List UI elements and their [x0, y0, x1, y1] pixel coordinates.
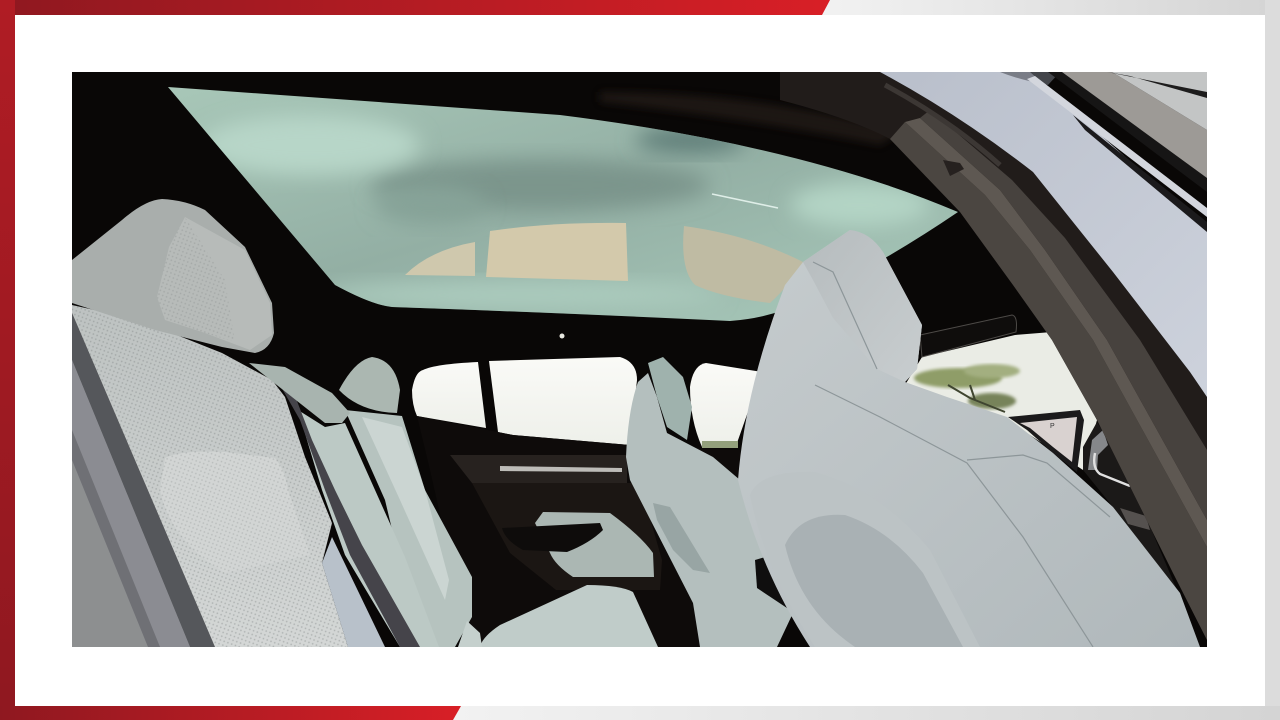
dark headliner [72, 72, 1207, 647]
seat cushion [480, 585, 658, 647]
front side window sky [905, 332, 1097, 470]
display screen: P [1050, 423, 1055, 430]
dashboard and steering wheel [1083, 422, 1177, 590]
frame: left red band [0, 0, 15, 720]
frame: right grey band [1265, 0, 1280, 720]
far rear seat [339, 357, 658, 647]
display screen [1008, 410, 1084, 472]
driver seat, large [738, 230, 1200, 647]
seat side panel [301, 412, 420, 647]
roof reflections of rear windows [405, 242, 475, 276]
frame: top band [0, 0, 1280, 15]
rear side windows [412, 357, 762, 448]
light car body [880, 72, 1207, 397]
rear view mirror [920, 315, 1016, 357]
headrest [803, 230, 922, 382]
dome light [560, 334, 564, 338]
near headrest [72, 199, 274, 353]
fabric seat back [72, 305, 348, 647]
frame: bottom band [0, 706, 1280, 720]
front passenger seat, small [626, 357, 797, 647]
seat seams [813, 262, 1110, 647]
panoramic glass roof [168, 87, 958, 321]
near rear seat [72, 199, 439, 647]
lumbar panel [160, 452, 310, 573]
side window trim [1048, 72, 1207, 192]
tree [914, 364, 1020, 412]
door insert [535, 512, 654, 577]
seat back recess [750, 472, 980, 647]
photo: car interior [72, 72, 1207, 647]
door handle trim [500, 466, 622, 472]
lower bolster [322, 537, 385, 647]
pillar clip [943, 160, 964, 176]
door panel [417, 416, 662, 590]
seat edge strips [72, 330, 215, 647]
seat belt [280, 385, 420, 647]
shoulder bolster [249, 363, 350, 423]
door frame pillar [780, 72, 1207, 640]
armrest [502, 523, 603, 552]
